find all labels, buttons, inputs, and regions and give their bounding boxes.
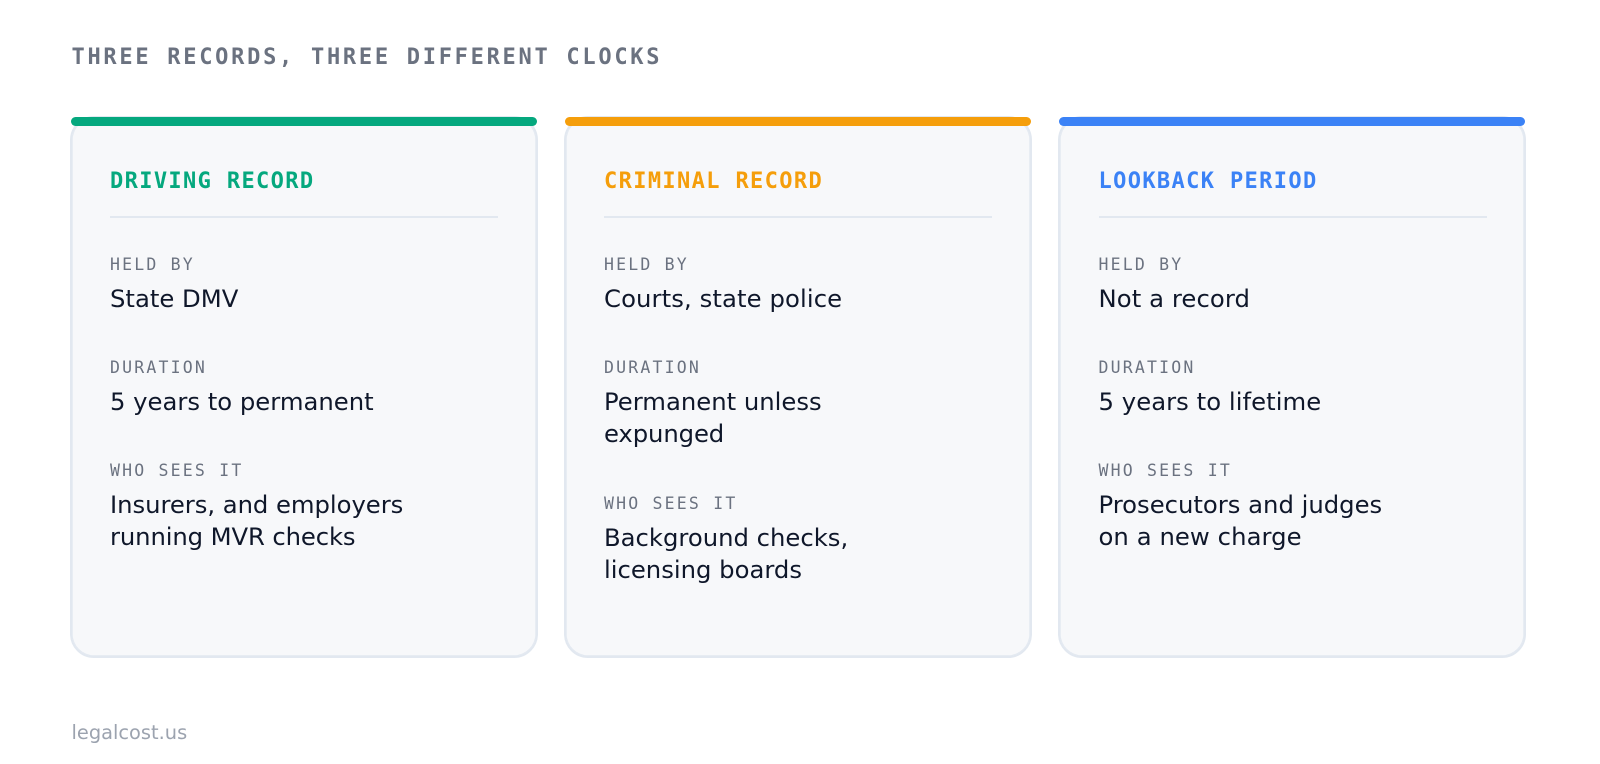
label: held by: HELD BY bbox=[110, 255, 195, 274]
panel: criminal record bbox=[564, 116, 1032, 658]
value: who sees it bbox=[604, 523, 848, 584]
panel heading: DRIVING RECORD bbox=[110, 169, 314, 194]
card background bbox=[70, 116, 538, 658]
title: THREE RECORDS, THREE DIFFERENT CLOCKS bbox=[72, 45, 662, 70]
panel heading: CRIMINAL RECORD bbox=[604, 169, 823, 194]
value: who sees it: Background checks, bbox=[604, 523, 848, 552]
panel: lookback period bbox=[1058, 116, 1526, 658]
label: duration: DURATION bbox=[1098, 358, 1196, 377]
value: held by: Not a record bbox=[1098, 284, 1250, 313]
label: duration: DURATION bbox=[110, 358, 207, 377]
panel: driving record bbox=[70, 116, 538, 658]
card background bbox=[1058, 116, 1526, 658]
value: who sees it bbox=[1098, 490, 1382, 551]
label: duration: DURATION bbox=[604, 358, 701, 377]
label: who sees it: WHO SEES IT bbox=[110, 461, 243, 480]
label: held by: HELD BY bbox=[1098, 255, 1183, 274]
value: who sees it: running MVR checks bbox=[110, 522, 356, 551]
label: who sees it: WHO SEES IT bbox=[604, 494, 737, 513]
accent bar bbox=[71, 117, 537, 126]
value: who sees it: licensing boards bbox=[604, 555, 802, 584]
value: duration: 5 years to permanent bbox=[110, 387, 374, 416]
panel heading: LOOKBACK PERIOD bbox=[1098, 169, 1318, 194]
value: who sees it bbox=[110, 490, 403, 551]
label: who sees it: WHO SEES IT bbox=[1098, 461, 1232, 480]
value: who sees it: Insurers, and employers bbox=[110, 490, 403, 519]
accent bar bbox=[565, 117, 1031, 126]
value: duration: expunged bbox=[604, 419, 724, 448]
label: held by: HELD BY bbox=[604, 255, 689, 274]
value: held by: State DMV bbox=[110, 284, 238, 313]
footer source: legalcost.us bbox=[72, 721, 187, 744]
value: duration: Permanent unless bbox=[604, 387, 822, 416]
value: duration: 5 years to lifetime bbox=[1098, 387, 1321, 416]
value: held by: Courts, state police bbox=[604, 284, 842, 313]
value: who sees it: Prosecutors and judges bbox=[1098, 490, 1382, 519]
value: duration bbox=[604, 387, 822, 448]
card background bbox=[564, 116, 1032, 658]
value: who sees it: on a new charge bbox=[1098, 522, 1302, 551]
accent bar bbox=[1059, 117, 1525, 126]
